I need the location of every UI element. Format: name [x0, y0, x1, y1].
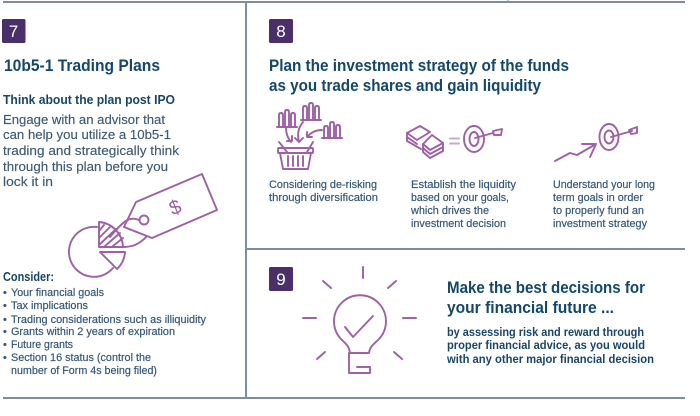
icon: money equals target [407, 126, 502, 158]
caption: establish the liquidity: which drives the [410, 205, 489, 217]
panel: step 8 investment strategy [269, 19, 655, 230]
list: considerations: • [3, 326, 7, 338]
panel: step 7 trading plans [2, 19, 217, 377]
heading: consider: Consider: [3, 270, 54, 284]
heading: make the best decisions: your financial future ... [447, 298, 614, 317]
caption: establish the liquidity [410, 179, 516, 230]
icon: charts into basket [277, 103, 342, 169]
list: considerations [3, 287, 206, 377]
text block: engage with an advisor: Engage with an advisor that [3, 112, 165, 127]
list: considerations: Section 16 status (control the [11, 352, 151, 364]
caption: de-risking [269, 179, 378, 204]
subheading: think about the plan: Think about the plan post IPO [3, 93, 175, 107]
icon: light bulb with check [303, 267, 416, 373]
list: considerations: Future grants [11, 339, 73, 351]
text block: engage with an advisor: trading and strategically think [3, 143, 180, 158]
badge: 7 [2, 19, 26, 43]
heading: make the best decisions [447, 278, 645, 317]
text block: assessing risk and reward: proper financial advice, as you would [447, 340, 645, 352]
list: considerations: • [3, 314, 7, 326]
caption: establish the liquidity: Establish the liquidity [411, 179, 516, 191]
text block: engage with an advisor: through this plan before you [3, 159, 168, 174]
caption: long term goals: Understand your long [553, 179, 655, 191]
list: considerations: • [3, 339, 7, 351]
caption: establish the liquidity: investment decision [411, 218, 506, 230]
icon: price tag and pie chart: $ [166, 196, 185, 220]
text block: assessing risk and reward: by assessing risk and reward through [447, 327, 644, 339]
caption: long term goals: investment strategy [553, 218, 647, 230]
list: considerations: Tax implications [11, 300, 88, 312]
list: considerations: • [3, 287, 7, 299]
heading: 10b5-1 Trading Plans: 10b5-1 Trading Plans [4, 56, 160, 75]
text block: assessing risk and reward [446, 327, 654, 366]
badge: 9 [269, 267, 293, 291]
text block: engage with an advisor: lock it in [3, 174, 53, 189]
list: considerations: Your financial goals [11, 287, 104, 299]
badge: 8 [269, 19, 293, 43]
heading: plan the investment strategy [269, 56, 569, 95]
list: considerations: • [3, 352, 7, 364]
panel: step 9 best decisions [269, 267, 654, 373]
caption: establish the liquidity: based on your goals, [411, 192, 509, 204]
icon: price tag and pie chart [69, 174, 217, 277]
text block: assessing risk and reward: with any other major financial decision [446, 354, 654, 366]
caption: de-risking: through diversification [269, 192, 378, 204]
text block: engage with an advisor [3, 112, 180, 189]
badge: 7: 7 [9, 22, 18, 41]
caption: de-risking: Considering de-risking [269, 179, 377, 191]
list: considerations: • [3, 300, 7, 312]
caption: long term goals: term goals in order [553, 192, 643, 204]
list: considerations: Trading considerations such as illiquidity [11, 314, 206, 326]
heading: plan the investment strategy: as you trade shares and gain liquidity [269, 76, 541, 95]
caption: long term goals: to properly fund an [553, 205, 644, 217]
caption: long term goals [553, 179, 655, 230]
heading: plan the investment strategy: Plan the investment strategy of the funds [269, 56, 569, 75]
list: considerations: Grants within 2 years of expiration [11, 326, 175, 338]
badge: 9: 9 [276, 270, 286, 289]
text block: engage with an advisor: can help you utilize a 10b5-1 [3, 127, 171, 142]
list: considerations: number of Form 4s being filed) [11, 365, 157, 377]
icon: rising arrow to target [555, 124, 637, 161]
heading: make the best decisions: Make the best decisions for [447, 278, 645, 297]
badge: 8: 8 [276, 22, 286, 41]
